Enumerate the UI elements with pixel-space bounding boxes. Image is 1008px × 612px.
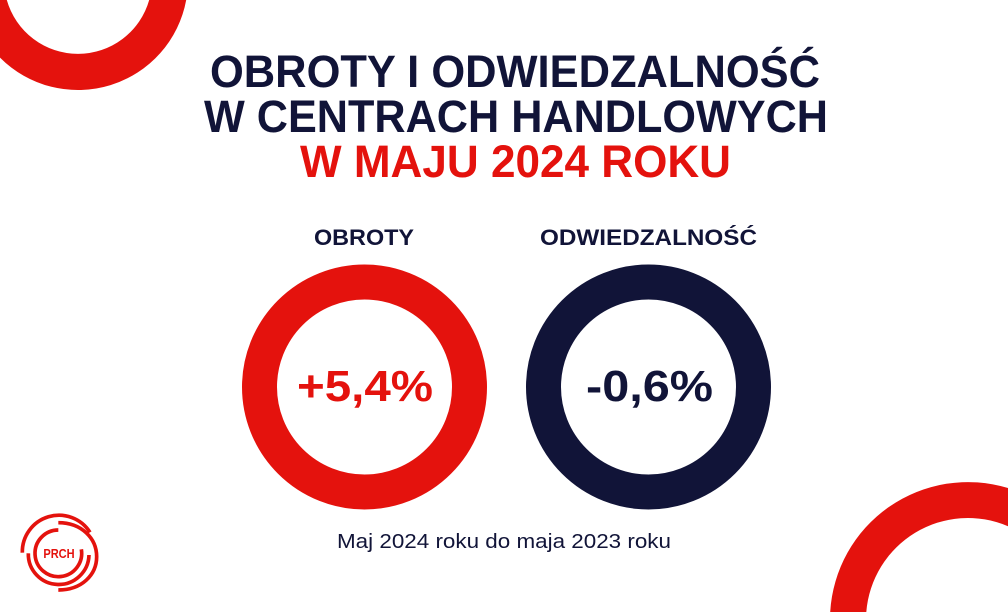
title: W MAJU 2024 ROKU <box>300 136 731 187</box>
donut: odwiedzalność <box>544 282 754 492</box>
value: obroty: +5,4% <box>297 362 433 411</box>
logo: PRCH <box>22 515 97 590</box>
caption: Maj 2024 roku do maja 2023 roku <box>337 531 671 553</box>
decorative ring: bottom right <box>830 482 1008 612</box>
heading: obroty: OBROTY <box>314 225 414 250</box>
donut: obroty <box>260 282 470 492</box>
logo: PRCH: PRCH <box>43 547 75 561</box>
heading: odwiedzalność: ODWIEDZALNOŚĆ <box>540 225 757 250</box>
title: W CENTRACH HANDLOWYCH <box>204 91 828 142</box>
title: OBROTY I ODWIEDZALNOŚĆ <box>210 46 820 97</box>
value: odwiedzalność: -0,6% <box>586 362 713 411</box>
title <box>204 46 828 187</box>
decorative ring: top left <box>0 0 186 90</box>
